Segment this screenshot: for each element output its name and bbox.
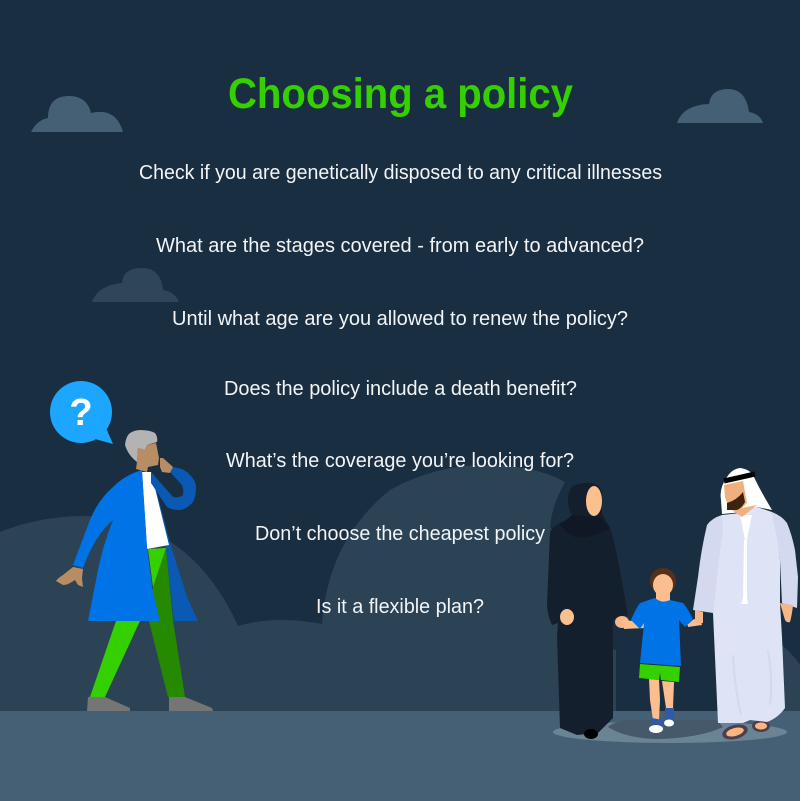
item 4: Does the policy include a death benefit? — [224, 378, 577, 400]
hills — [0, 465, 800, 711]
item 1: Check if you are genetically disposed to any critical illnesses — [139, 162, 662, 184]
item 7: Is it a flexible plan? — [316, 596, 484, 618]
item 5: What’s the coverage you’re looking for? — [226, 450, 574, 472]
child — [622, 568, 702, 733]
item 3: Until what age are you allowed to renew the policy? — [172, 308, 628, 330]
cloud: top left — [31, 96, 123, 132]
cloud: top right — [677, 89, 763, 123]
cloud: middle left — [92, 268, 179, 302]
family shadow on ground — [553, 720, 787, 743]
man in kandura — [693, 468, 798, 742]
icon: question speech bubble — [50, 381, 113, 444]
item 2: What are the stages covered - from early to advanced? — [156, 235, 644, 257]
thinking man figure — [56, 430, 213, 711]
woman in abaya — [547, 483, 629, 739]
icon: question speech bubble: ? — [69, 392, 93, 434]
item 6: Don’t choose the cheapest policy — [255, 523, 545, 545]
checklist text — [139, 162, 662, 618]
title: Choosing a policy — [228, 70, 573, 118]
ground — [0, 711, 800, 801]
